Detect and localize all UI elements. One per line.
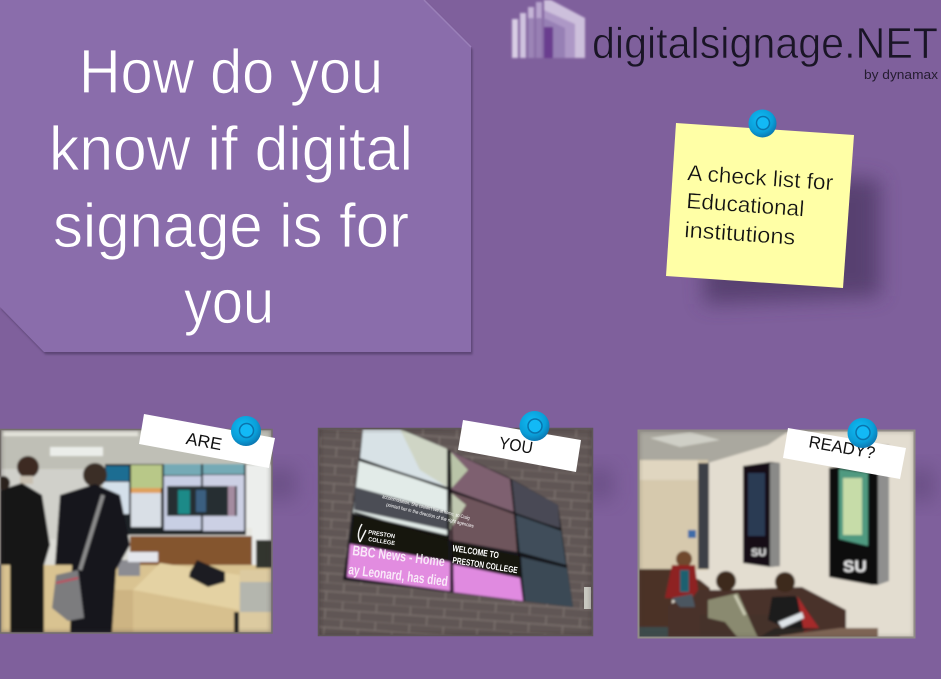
- heading: signage is for: [53, 192, 409, 261]
- icon: blue pin: [748, 110, 776, 138]
- icon: blue pin: [848, 418, 878, 448]
- students: [0, 456, 130, 633]
- icon: blue pin: [520, 411, 550, 441]
- seated students: [665, 551, 819, 638]
- photo: visitors at video wall: [0, 429, 272, 633]
- kiosk left: SU: [751, 547, 766, 559]
- label: ARE: ARE: [185, 429, 223, 454]
- video wall: [103, 464, 246, 535]
- icon: building bars: [512, 0, 585, 58]
- kiosk right: SU: [843, 557, 867, 576]
- kiosk left: [743, 462, 780, 567]
- kiosk right: [829, 445, 889, 585]
- video wall captions: [348, 494, 518, 589]
- note text: [684, 160, 834, 250]
- telephone: [189, 560, 225, 587]
- heading: know if digital: [49, 115, 413, 184]
- shadows behind photos: [262, 468, 935, 502]
- photo: Preston College video wall: [318, 428, 593, 636]
- label: READY?: READY?: [807, 432, 877, 463]
- video wall captions: accommodation. She couldn't live at home, so Craig: [382, 494, 470, 522]
- heading: you: [184, 268, 274, 337]
- tagline: by dynamax: [864, 67, 939, 82]
- heading: How do you: [79, 38, 383, 107]
- label: YOU: [458, 411, 581, 472]
- label: YOU: YOU: [498, 433, 534, 458]
- video wall captions: WELCOME TO: [452, 543, 500, 560]
- video wall captions: PRESTON: [368, 530, 395, 540]
- note text: institutions: [684, 217, 796, 250]
- label: ARE: [139, 414, 275, 468]
- logo: [512, 0, 939, 82]
- note text: A check list for: [687, 160, 834, 195]
- note text: Educational: [686, 188, 805, 221]
- video wall captions: pointed her in the direction of the right agencies: [386, 502, 475, 530]
- video wall captions: BBC News - Home: [352, 542, 446, 569]
- photo: student lounge with kiosks: [638, 430, 915, 638]
- sofas: [638, 569, 710, 627]
- panel: title: [0, 0, 472, 354]
- sticky note: checklist: [666, 110, 880, 304]
- icon: blue pin: [231, 416, 261, 446]
- heading: [49, 38, 413, 337]
- video wall captions: ay Leonard, has died: [348, 561, 449, 589]
- label: READY?: [783, 418, 906, 479]
- video wall captions: PRESTON COLLEGE: [452, 555, 518, 575]
- left bottom screen: [352, 516, 448, 560]
- video wall captions: COLLEGE: [368, 537, 395, 547]
